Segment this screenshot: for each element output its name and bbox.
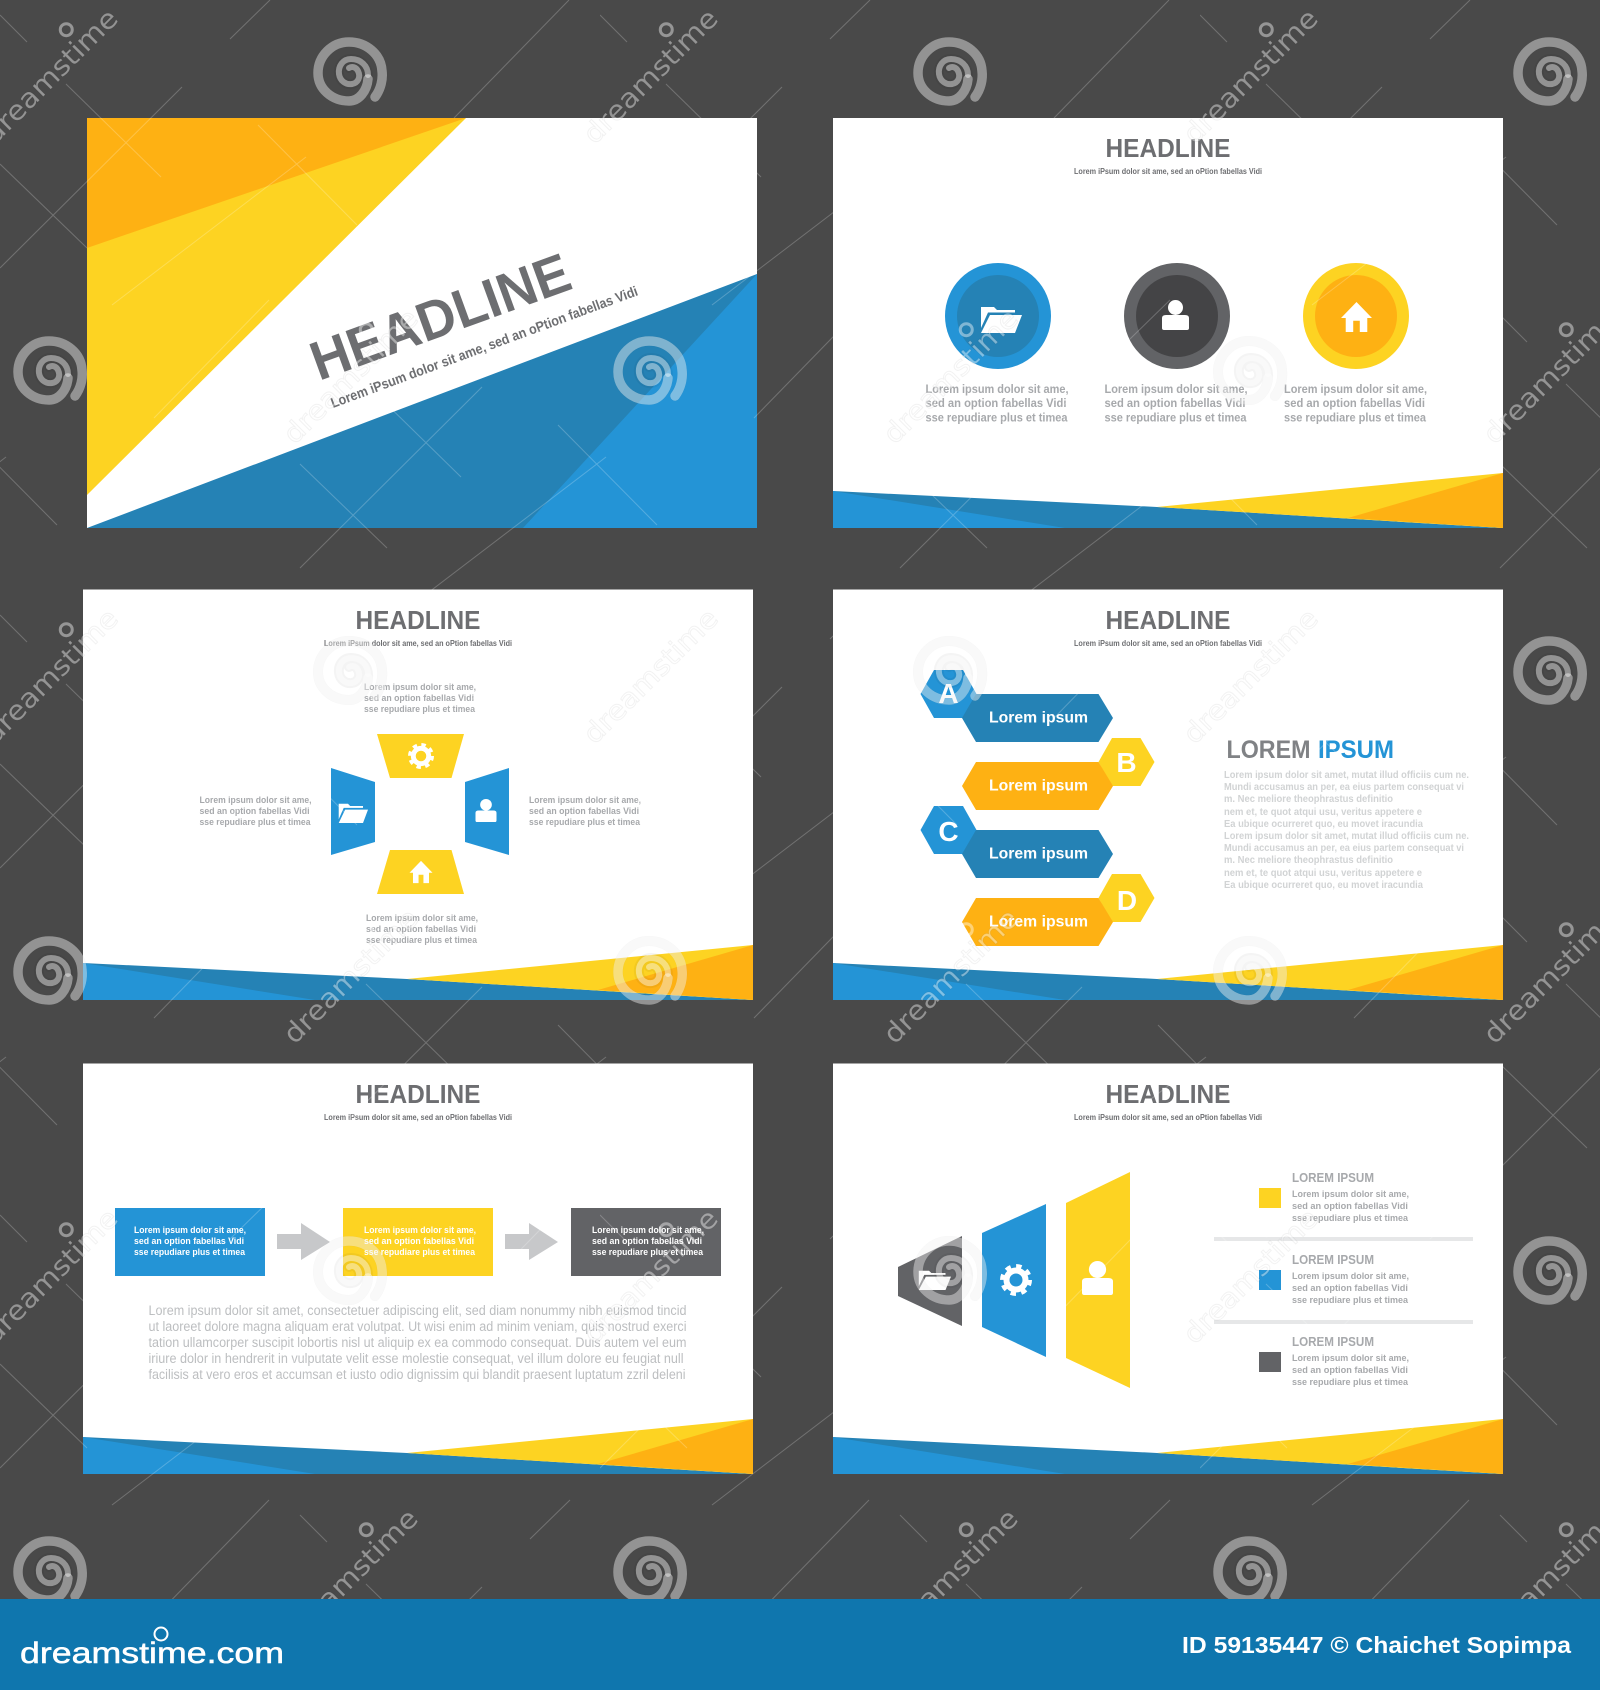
watermark wordmarks: dreamstime bbox=[1178, 1203, 1325, 1350]
grey funnel segment with folder bbox=[898, 1236, 962, 1326]
footer credit: ID 59135447 © Chaichet Sopimpa bbox=[1182, 1632, 1571, 1658]
right trapezoid with person bbox=[465, 768, 509, 855]
watermark wordmarks: dreamstime bbox=[878, 903, 1025, 1050]
right text: sse repudiare plus et timea bbox=[529, 817, 641, 828]
watermark wordmarks: dreamstime bbox=[278, 1503, 425, 1650]
side paragraph: m. Nec meliore theophrastus definitio bbox=[1224, 855, 1393, 866]
legend item: blue: sed an option fabellas Vidi bbox=[1292, 1283, 1408, 1294]
watermark wordmarks: dreamstime bbox=[278, 903, 425, 1050]
subheading: Lorem iPsum dolor sit ame, sed an oPtion fabellas Vidi bbox=[1074, 638, 1262, 648]
footer band bbox=[833, 945, 1503, 1000]
yellow step box bbox=[343, 1208, 493, 1276]
grey step box bbox=[571, 1208, 721, 1276]
text block 1: Lorem ipsum dolor sit ame, bbox=[926, 382, 1068, 396]
text block 2: sed an option fabellas Vidi bbox=[1104, 396, 1246, 410]
right text bbox=[529, 795, 641, 828]
item A bbox=[920, 670, 1113, 742]
legend item: blue: LOREM IPSUM bbox=[1292, 1253, 1374, 1267]
subheading: Lorem iPsum dolor sit ame, sed an oPtion fabellas Vidi bbox=[1074, 1112, 1262, 1122]
item A: A bbox=[938, 678, 959, 709]
side paragraph: Mundi accusamus an per, ea eius partem consequat vi bbox=[1224, 782, 1464, 793]
legend item: yellow: sse repudiare plus et timea bbox=[1292, 1213, 1409, 1224]
yellow step box: Lorem ipsum dolor sit ame, bbox=[364, 1225, 476, 1236]
left text: Lorem ipsum dolor sit ame, bbox=[200, 795, 312, 806]
blue funnel segment with gear bbox=[982, 1204, 1046, 1357]
side paragraph: nem et, te quot atqui usu, veritus appetere e bbox=[1224, 868, 1422, 879]
body paragraph: iriure dolor in hendrerit in vulputate velit esse molestie consequat, vel illum dolore eu feugiat null bbox=[148, 1351, 684, 1366]
watermark wordmarks: dreamstime bbox=[878, 303, 1025, 450]
side paragraph: Lorem ipsum dolor sit amet, mutat illud officiis cum ne. bbox=[1224, 831, 1469, 842]
body paragraph: tation ullamcorper suscipit lobortis nisl ut aliquip ex ea commodo consequat. Duis autem vel eum bbox=[148, 1335, 686, 1350]
text block 1: sse repudiare plus et timea bbox=[926, 410, 1068, 424]
side paragraph: Ea ubique ocurreret quo, eu movet iracundia bbox=[1224, 819, 1423, 830]
top text: sed an option fabellas Vidi bbox=[364, 693, 474, 704]
item C: C bbox=[938, 816, 959, 847]
bottom text bbox=[366, 913, 478, 946]
right text: sed an option fabellas Vidi bbox=[529, 806, 639, 817]
legend item: yellow bbox=[1259, 1171, 1409, 1224]
panel: four trapezoids slide bbox=[83, 590, 753, 1000]
legend item: grey: Lorem ipsum dolor sit ame, bbox=[1292, 1353, 1409, 1364]
footer logo: dreamstime.com bbox=[20, 1637, 284, 1670]
blue step box: Lorem ipsum dolor sit ame, bbox=[134, 1225, 246, 1236]
icon: grey person circle bbox=[1124, 263, 1230, 369]
side title: IPSUM bbox=[1318, 736, 1394, 764]
yellow step box: sed an option fabellas Vidi bbox=[364, 1236, 474, 1247]
body paragraph: Lorem ipsum dolor sit amet, consectetuer adipiscing elit, sed diam nonummy nibh euismod tincid bbox=[148, 1303, 686, 1318]
light blue wedge bbox=[523, 274, 757, 528]
side paragraph: Mundi accusamus an per, ea eius partem consequat vi bbox=[1224, 843, 1464, 854]
orange corner triangle bbox=[87, 118, 466, 248]
panel: three circles slide bbox=[833, 118, 1503, 528]
panel: funnel legend slide bbox=[833, 1064, 1503, 1474]
footer bar bbox=[0, 1599, 1600, 1690]
legend item: blue: Lorem ipsum dolor sit ame, bbox=[1292, 1271, 1409, 1282]
watermark wordmarks: dreamstime bbox=[578, 603, 725, 750]
legend item: grey: sse repudiare plus et timea bbox=[1292, 1377, 1409, 1388]
legend item: grey: LOREM IPSUM bbox=[1292, 1335, 1374, 1349]
subheading: Lorem iPsum dolor sit ame, sed an oPtion fabellas Vidi bbox=[324, 1112, 512, 1122]
side paragraph: nem et, te quot atqui usu, veritus appetere e bbox=[1224, 807, 1422, 818]
legend item: blue bbox=[1259, 1253, 1409, 1306]
watermark wordmarks: dreamstime bbox=[1178, 3, 1325, 150]
text block 1 bbox=[926, 382, 1068, 424]
heading: HEADLINE bbox=[1106, 133, 1230, 163]
footer band bbox=[833, 473, 1503, 528]
legend item: yellow: sed an option fabellas Vidi bbox=[1292, 1201, 1408, 1212]
yellow corner triangle bbox=[87, 118, 466, 495]
side title: LOREM bbox=[1226, 736, 1310, 764]
yellow funnel segment with person bbox=[1066, 1172, 1130, 1388]
side paragraph: Lorem ipsum dolor sit amet, mutat illud officiis cum ne. bbox=[1224, 770, 1469, 781]
text block 3: sed an option fabellas Vidi bbox=[1284, 396, 1425, 410]
watermark wordmarks: dreamstime bbox=[878, 1503, 1025, 1650]
item D: D bbox=[1117, 885, 1137, 916]
side title bbox=[1226, 736, 1394, 764]
panel: process flow slide bbox=[83, 1064, 753, 1474]
text block 3: Lorem ipsum dolor sit ame, bbox=[1284, 382, 1427, 396]
blue step box: sse repudiare plus et timea bbox=[134, 1247, 246, 1258]
bottom text: Lorem ipsum dolor sit ame, bbox=[366, 913, 478, 924]
bottom text: sse repudiare plus et timea bbox=[366, 935, 478, 946]
legend item: yellow: LOREM IPSUM bbox=[1292, 1171, 1374, 1185]
left trapezoid with folder bbox=[331, 768, 375, 855]
panel: cover slide bbox=[87, 118, 757, 528]
subheading: Lorem iPsum dolor sit ame, sed an oPtion fabellas Vidi bbox=[324, 638, 512, 648]
item B: Lorem ipsum bbox=[989, 778, 1088, 794]
footer band bbox=[83, 945, 753, 1000]
subheading: Lorem iPsum dolor sit ame, sed an oPtion fabellas Vidi bbox=[1074, 166, 1262, 176]
legend item: yellow: Lorem ipsum dolor sit ame, bbox=[1292, 1189, 1409, 1200]
side paragraph bbox=[1224, 770, 1469, 891]
text block 2: Lorem ipsum dolor sit ame, bbox=[1104, 382, 1248, 396]
footer band bbox=[83, 1419, 753, 1474]
text block 3 bbox=[1284, 382, 1427, 424]
item A: Lorem ipsum bbox=[989, 710, 1088, 726]
arrow 1 bbox=[277, 1223, 330, 1260]
left text: sse repudiare plus et timea bbox=[200, 817, 311, 828]
legend item: grey bbox=[1259, 1335, 1409, 1388]
text block 1: sed an option fabellas Vidi bbox=[926, 396, 1066, 410]
top text: Lorem ipsum dolor sit ame, bbox=[364, 682, 476, 693]
legend item: grey: sed an option fabellas Vidi bbox=[1292, 1365, 1408, 1376]
side paragraph: m. Nec meliore theophrastus definitio bbox=[1224, 794, 1393, 805]
watermark wordmarks: dreamstime bbox=[1178, 603, 1325, 750]
text block 2 bbox=[1104, 382, 1248, 424]
side paragraph: Ea ubique ocurreret quo, eu movet iracundia bbox=[1224, 880, 1423, 891]
left text: sed an option fabellas Vidi bbox=[200, 806, 310, 817]
heading: HEADLINE bbox=[356, 1079, 480, 1109]
watermark wordmarks: dreamstime bbox=[578, 1203, 725, 1350]
panel: hexagon list slide bbox=[833, 590, 1503, 1000]
top text: sse repudiare plus et timea bbox=[364, 704, 476, 715]
watermark wordmarks: dreamstime bbox=[578, 3, 725, 150]
dark blue wedge bbox=[87, 274, 757, 528]
yellow step box: sse repudiare plus et timea bbox=[364, 1247, 476, 1258]
top trapezoid with gear bbox=[377, 734, 464, 778]
item B: B bbox=[1116, 747, 1137, 778]
cover headline: HEADLINE bbox=[302, 241, 579, 392]
icon: blue folder circle bbox=[945, 263, 1051, 369]
text block 3: sse repudiare plus et timea bbox=[1284, 410, 1426, 424]
grey step box: sse repudiare plus et timea bbox=[592, 1247, 704, 1258]
body paragraph: facilisis at vero eros et accumsan et iusto odio dignissim qui blandit praesent luptatum zzril deleni bbox=[148, 1367, 686, 1382]
item C: Lorem ipsum bbox=[989, 846, 1088, 862]
footer band bbox=[833, 1419, 1503, 1474]
watermark wordmarks: dreamstime bbox=[278, 303, 425, 450]
text block 2: sse repudiare plus et timea bbox=[1104, 410, 1247, 424]
item D bbox=[962, 874, 1154, 946]
item D: Lorem ipsum bbox=[989, 914, 1088, 930]
bottom trapezoid with house bbox=[377, 850, 464, 894]
heading: HEADLINE bbox=[1106, 1079, 1230, 1109]
grey step box: sed an option fabellas Vidi bbox=[592, 1236, 702, 1247]
body paragraph bbox=[148, 1303, 686, 1382]
blue step box: sed an option fabellas Vidi bbox=[134, 1236, 244, 1247]
item B bbox=[962, 738, 1154, 810]
bottom text: sed an option fabellas Vidi bbox=[366, 924, 476, 935]
heading: HEADLINE bbox=[356, 605, 480, 635]
item C bbox=[920, 806, 1113, 878]
top text bbox=[364, 682, 476, 715]
body paragraph: ut laoreet dolore magna aliquam erat volutpat. Ut wisi enim ad minim veniam, quis nostrud exerci bbox=[148, 1319, 686, 1334]
blue step box bbox=[115, 1208, 265, 1276]
cover subtitle: Lorem iPsum dolor sit ame, sed an oPtion fabellas Vidi bbox=[328, 283, 640, 411]
heading: HEADLINE bbox=[1106, 605, 1230, 635]
footer logo bbox=[20, 1628, 284, 1670]
legend item: blue: sse repudiare plus et timea bbox=[1292, 1295, 1409, 1306]
icon: yellow house circle bbox=[1303, 263, 1409, 369]
arrow 2 bbox=[505, 1223, 558, 1260]
grey step box: Lorem ipsum dolor sit ame, bbox=[592, 1225, 704, 1236]
left text bbox=[200, 795, 312, 828]
right text: Lorem ipsum dolor sit ame, bbox=[529, 795, 641, 806]
